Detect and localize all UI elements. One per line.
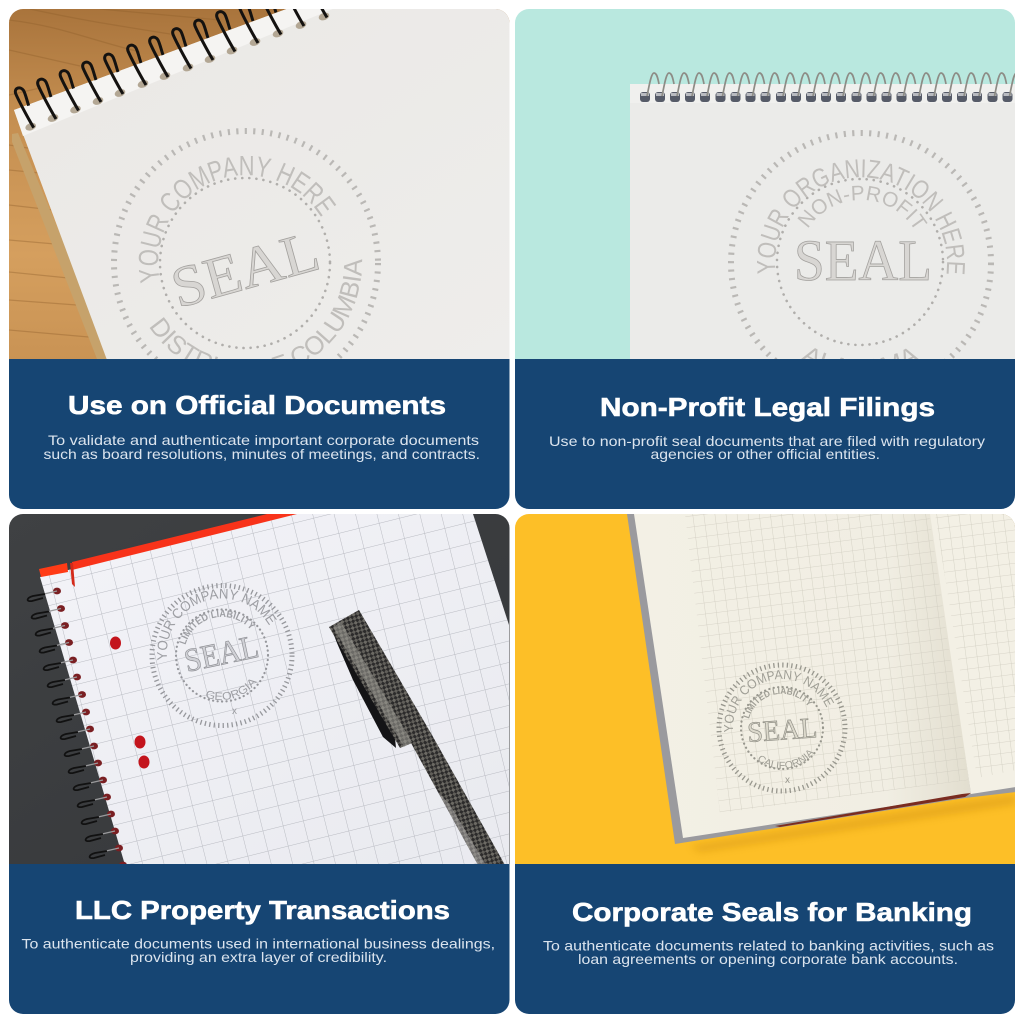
binding strip (14, 4, 345, 136)
seal impression: SEAL (164, 218, 326, 321)
seal impression: SEAL (181, 629, 262, 680)
backing board (12, 133, 112, 359)
heading: Non-Profit Legal Filings (600, 392, 935, 422)
seal impression: YOUR COMPANY HERE (138, 156, 336, 284)
notebook page (14, 4, 510, 360)
description: To authenticate documents related to banking activities, such as (543, 938, 994, 954)
seal impression: LIMITED LIABILITY (743, 688, 813, 718)
heading: Use on Official Documents (68, 390, 446, 420)
panel: LLC property transactions (9, 514, 510, 1014)
punched holes (110, 636, 150, 768)
photo: embossed seal on spiral notebook on wood (9, 9, 510, 359)
description: Use to non-profit seal documents that are filed with regulatory (549, 433, 985, 449)
panel: corporate seals for banking (515, 514, 1015, 1014)
right page (930, 514, 1016, 794)
spiral coils (15, 0, 330, 132)
caption band (9, 359, 510, 510)
seal impression: ALABAMA (801, 348, 918, 359)
caption band (515, 359, 1015, 510)
page grids (685, 514, 968, 813)
seal impression (111, 128, 381, 359)
description: agencies or other official entities. (650, 446, 880, 462)
book cover (627, 514, 1016, 844)
seal impression: GEORGIA (206, 680, 257, 700)
notebook page (40, 514, 509, 865)
panel: non-profit legal filings (515, 9, 1015, 509)
photo: embossed seal on grid notebook with pen on slate (9, 514, 510, 864)
pen (329, 610, 505, 865)
seal impression: x (785, 775, 790, 786)
red top strip (39, 514, 297, 587)
seal impression: CALIFORNIA (758, 750, 814, 769)
seal impression: YOUR ORGANIZATION HERE (757, 159, 965, 274)
left page (634, 514, 971, 838)
seal impression: SEAL (746, 712, 818, 749)
heading: LLC Property Transactions (75, 895, 450, 925)
description: To authenticate documents used in international business dealings, (22, 936, 495, 952)
seal impression (150, 583, 294, 728)
heading: Corporate Seals for Banking (572, 897, 972, 927)
seal impression: YOUR COMPANY NAME (724, 670, 834, 732)
seal impression: SEAL (794, 228, 932, 293)
notebook page (630, 84, 1016, 360)
description (543, 938, 994, 967)
seal impression (728, 130, 994, 359)
description: loan agreements or opening corporate bank accounts. (578, 951, 958, 967)
seal impression: x (232, 706, 237, 717)
description (44, 435, 479, 462)
page edge tint (775, 793, 971, 827)
spiral coils (28, 588, 127, 875)
description (22, 938, 494, 965)
caption band (9, 864, 510, 1015)
caption band (515, 864, 1015, 1015)
description: providing an extra layer of credibility. (130, 949, 387, 965)
spiral coils (640, 73, 1022, 102)
grid lines (9, 514, 510, 865)
seal impression: NON-PROFIT (798, 186, 928, 228)
seal impression: YOUR COMPANY NAME (157, 588, 277, 660)
photo: embossed seal in open grid book on yellow (515, 514, 1015, 864)
description (550, 436, 985, 462)
photo: embossed seal on notebook on mint paper (515, 9, 1015, 359)
seal impression (716, 662, 848, 794)
description: such as board resolutions, minutes of meetings, and contracts. (44, 446, 480, 462)
seal impression: LIMITED LIABILITY (179, 610, 256, 644)
seal impression: DISTRICT OF COLUMBIA (150, 259, 362, 359)
description: To validate and authenticate important corporate documents (48, 432, 479, 448)
book shadow (690, 795, 1016, 852)
panel: use on official documents (9, 9, 510, 509)
